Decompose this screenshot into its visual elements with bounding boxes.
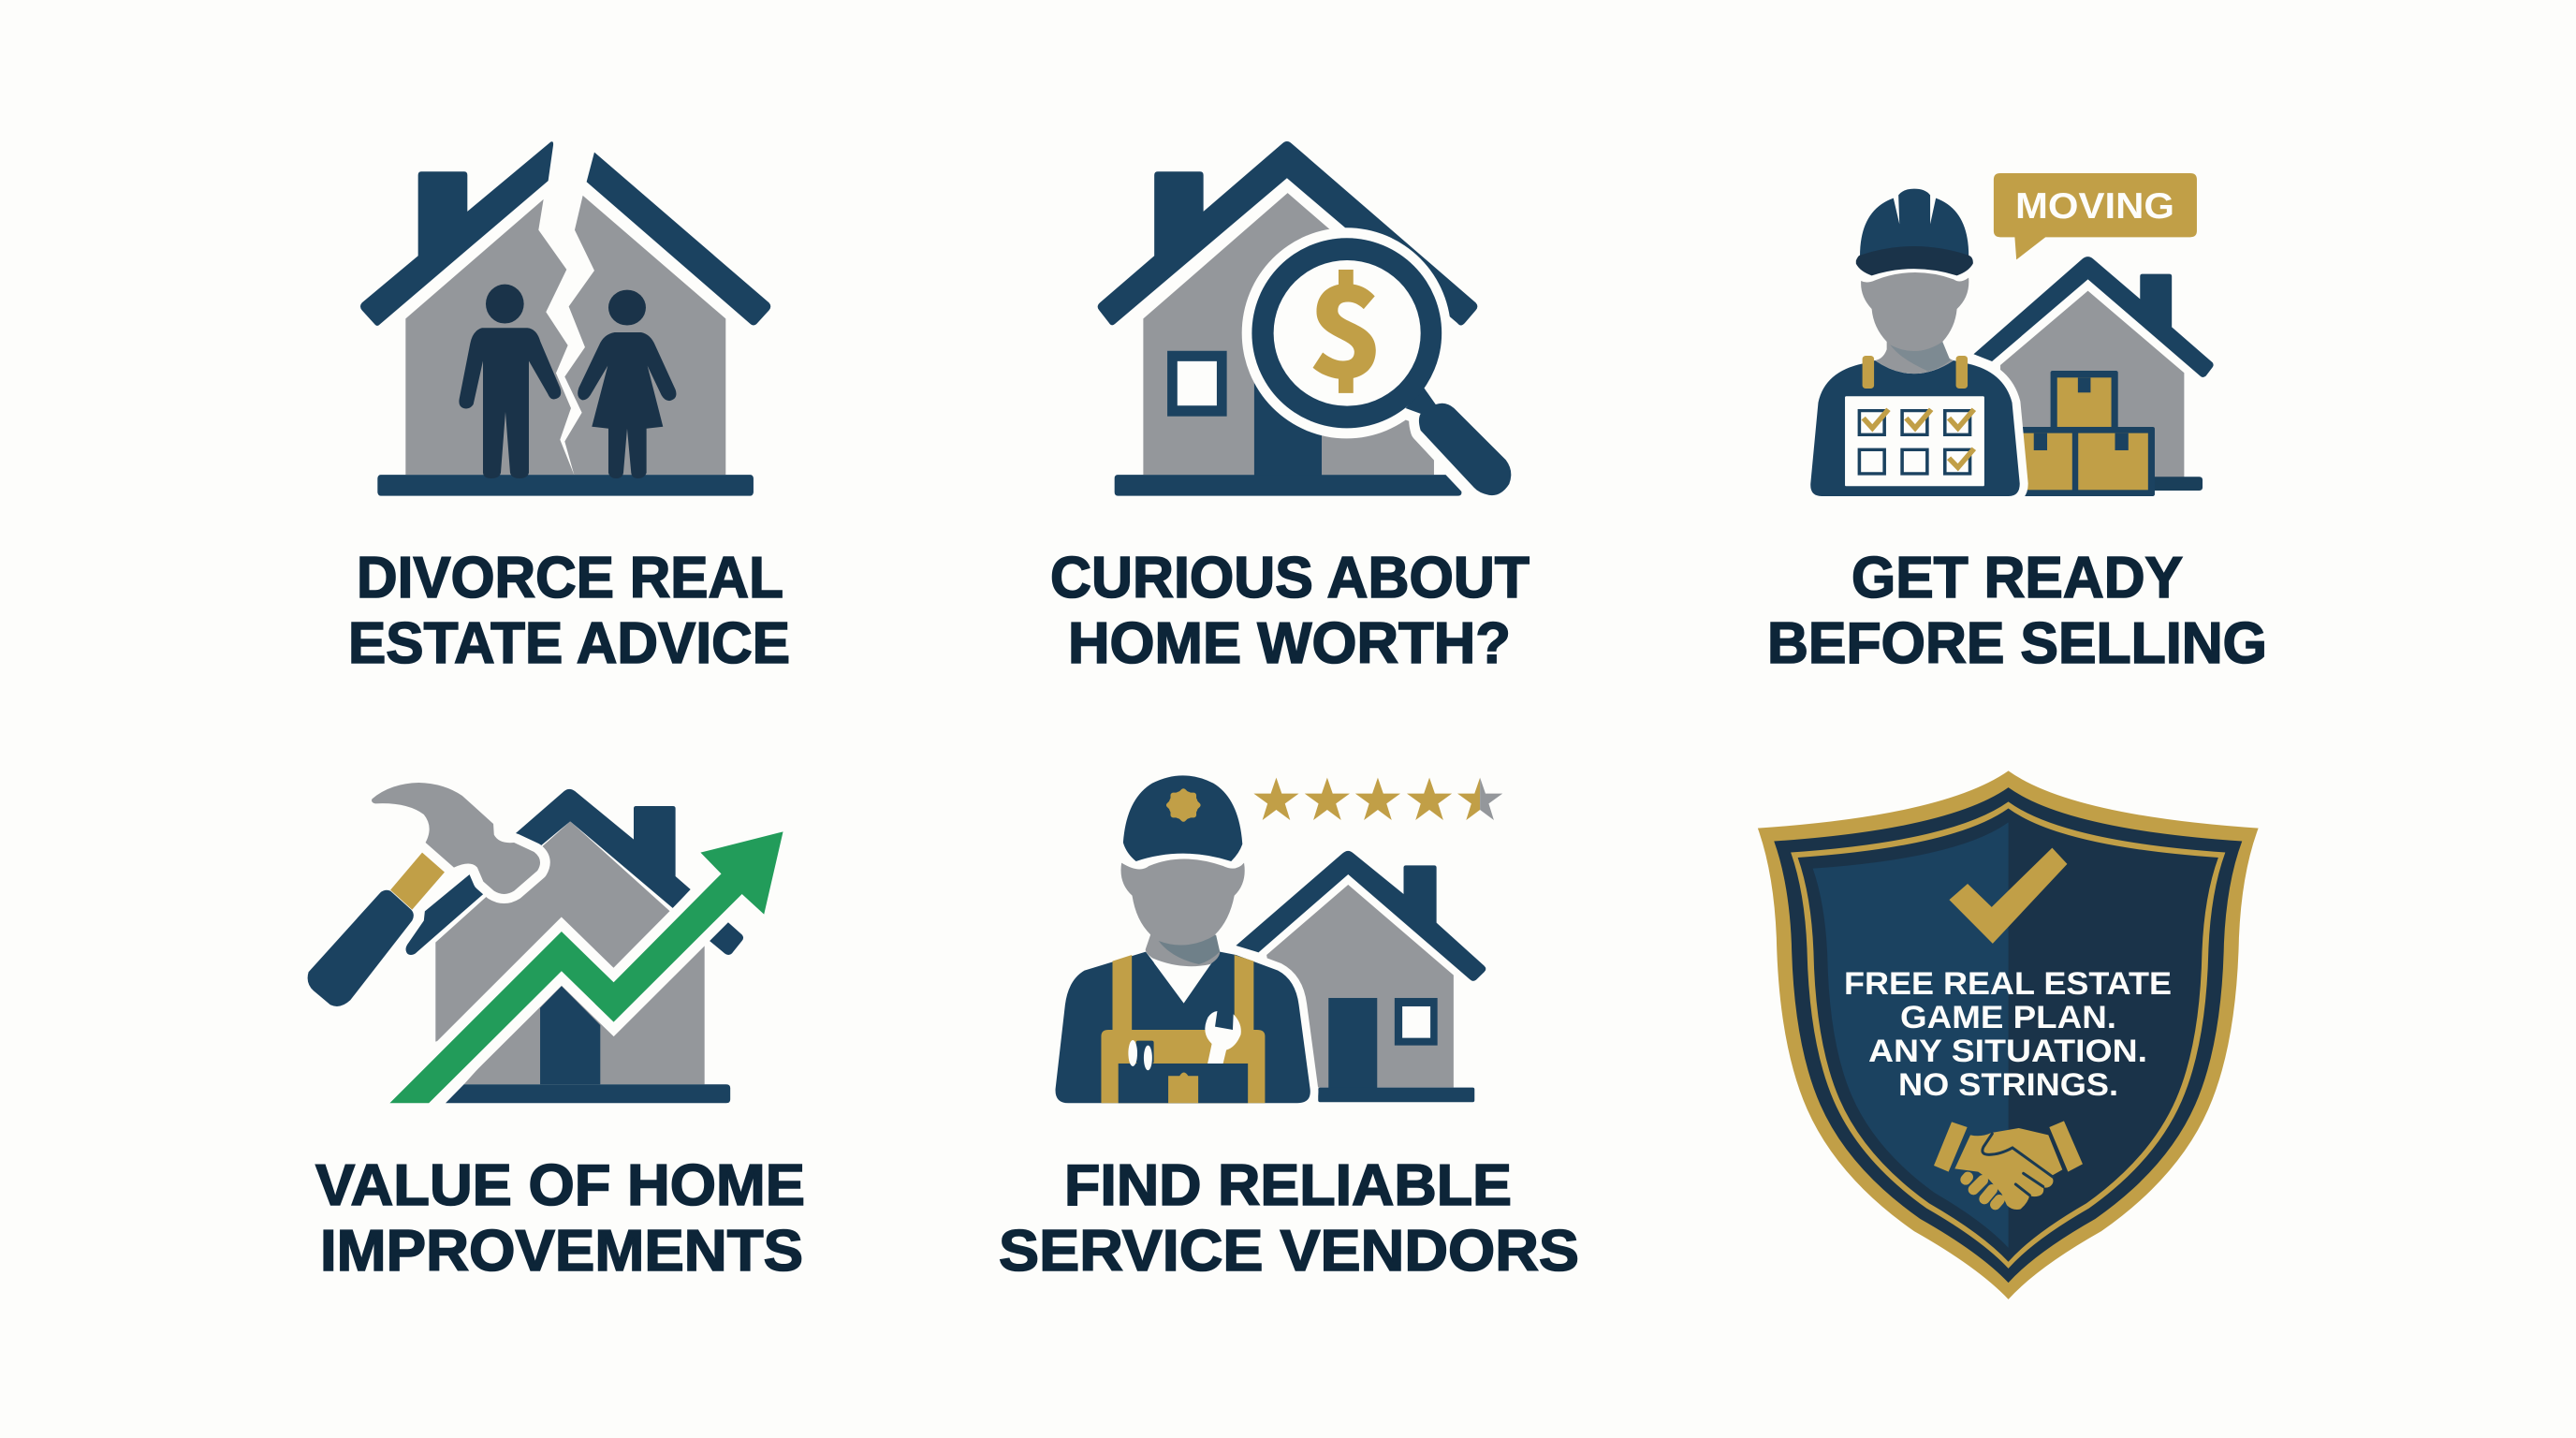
roof	[1236, 851, 1486, 981]
door	[1328, 998, 1377, 1089]
icon: hammer house and rising arrow	[308, 783, 783, 1103]
heading: improvements: IMPROVEMENTS	[320, 1219, 803, 1284]
shield text: NO STRINGS.	[1898, 1067, 2118, 1103]
heading: improvements: VALUE OF HOME	[315, 1153, 805, 1218]
heading: before selling: BEFORE SELLING	[1767, 611, 2267, 676]
right roof	[587, 153, 770, 326]
wall	[1266, 885, 1454, 1088]
heading: home worth: HOME WORTH?	[1068, 611, 1511, 676]
roof	[1973, 257, 2214, 377]
wall	[1143, 193, 1434, 475]
heading: before selling: GET READY	[1852, 546, 2183, 610]
heading: improvements	[315, 1153, 805, 1284]
handshake	[1934, 1121, 2083, 1210]
door	[540, 986, 600, 1084]
roof with chimney	[1098, 141, 1477, 326]
icon: vendor with stars and house	[1056, 775, 1502, 1103]
dollar sign: $	[1308, 230, 1384, 414]
panel: value of home improvements	[308, 783, 805, 1284]
ground	[446, 1084, 730, 1103]
shield	[1758, 770, 2259, 1299]
heading: home worth: CURIOUS ABOUT	[1050, 546, 1530, 610]
magnifier	[1242, 227, 1511, 495]
man	[459, 285, 561, 478]
heading: divorce: ESTATE ADVICE	[348, 611, 790, 676]
window	[1167, 351, 1227, 417]
shield text: GAME PLAN.	[1900, 1000, 2116, 1035]
heading: divorce	[348, 546, 790, 676]
ground	[1115, 475, 1461, 496]
speech bubble	[1994, 173, 2197, 259]
vendor	[1056, 775, 1310, 1103]
left wall	[405, 199, 574, 475]
woman	[578, 290, 676, 478]
ground	[1318, 1088, 1474, 1102]
ground	[377, 475, 754, 496]
heading: before selling	[1767, 546, 2267, 676]
shield text: ANY SITUATION.	[1868, 1034, 2147, 1069]
icon: worker with checklist and boxes	[1810, 173, 2214, 496]
heading: vendors: FIND RELIABLE	[1064, 1153, 1512, 1218]
roof end	[710, 922, 743, 955]
heading: vendors	[999, 1153, 1579, 1284]
heading: home worth	[1050, 546, 1530, 676]
ground	[2151, 477, 2203, 491]
heading: divorce: DIVORCE REAL	[357, 546, 783, 610]
door	[1254, 371, 1322, 478]
checklist	[1845, 396, 1984, 486]
panel: find reliable service vendors	[999, 775, 1579, 1284]
hammer	[308, 783, 540, 1006]
panel: divorce real estate advice	[348, 141, 790, 676]
heading: vendors: SERVICE VENDORS	[999, 1219, 1579, 1284]
wall	[2000, 291, 2184, 477]
check mark	[1949, 848, 2067, 944]
icon: house with magnifier	[1098, 141, 1511, 496]
boxes	[2017, 371, 2155, 496]
icon: broken house with couple	[360, 141, 770, 496]
shield text: FREE REAL ESTATE	[1844, 966, 2172, 1002]
shield text	[1844, 966, 2172, 1103]
wall	[435, 821, 705, 1084]
roof	[516, 789, 691, 908]
rating stars	[1253, 778, 1502, 820]
panel: curious about home worth	[1050, 141, 1530, 676]
roof left end behind hammer	[406, 873, 483, 955]
panel: free game plan shield	[1758, 770, 2259, 1299]
arrow halo	[389, 831, 783, 1103]
infographic canvas	[307, 141, 2264, 1299]
bubble label: MOVING	[2015, 186, 2174, 227]
left roof with chimney	[360, 141, 553, 326]
panel: get ready before selling	[1767, 173, 2267, 676]
right wall	[564, 196, 725, 475]
window	[1395, 998, 1438, 1046]
worker	[1810, 189, 2020, 496]
growth arrow	[389, 831, 783, 1103]
